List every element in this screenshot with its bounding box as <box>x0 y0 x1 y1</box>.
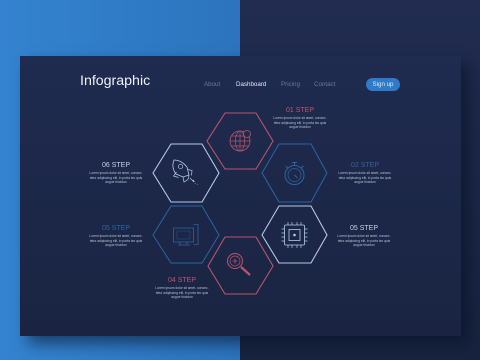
text block: 02 step: augue tincidun <box>354 180 376 184</box>
heading: Infographic: Infographic <box>80 73 150 89</box>
text block: 01 step <box>273 107 327 129</box>
text block: 03 step <box>337 225 391 247</box>
text block: 03 step: tetur adipiscing elit, in porta leo quis <box>338 239 390 243</box>
text block: 06 step: tetur adipiscing elit, in porta leo quis <box>90 176 142 180</box>
text block: 06 step: 06 STEP <box>102 162 130 169</box>
panel: main card <box>20 56 461 336</box>
nav: Dashboard: Dashboard <box>236 81 266 88</box>
background: blue left half <box>0 0 240 360</box>
text block: 02 step <box>338 162 392 184</box>
hexagon and icon: 02 stopwatch <box>262 144 327 202</box>
hexagon and icon: 06 rocket <box>153 144 219 202</box>
text block: 05 step: augue tincidun <box>105 243 127 247</box>
text block: 03 step: 05 STEP <box>350 225 378 232</box>
text block: 05 step: 05 STEP <box>102 225 130 232</box>
text block: 04 step: augue tincidun <box>171 295 193 299</box>
text block: 06 step: augue tincidun <box>105 180 127 184</box>
hexagon and icon: 01 globe <box>207 113 273 169</box>
text block: 05 step: Lorem ipsum dolor sit amet, consec- <box>89 234 143 238</box>
nav: Contact: Contact <box>314 81 335 88</box>
text block: 03 step: augue tincidun <box>353 243 375 247</box>
text block: 06 step <box>89 162 143 184</box>
button: Sign up: Sign up <box>372 81 394 88</box>
text block: 03 step: Lorem ipsum dolor sit amet, consec- <box>337 234 391 238</box>
text block: 01 step: augue tincidun <box>289 125 311 129</box>
nav: Pricing: Pricing <box>281 81 300 88</box>
hexagon and icon: 05 monitor <box>153 206 219 263</box>
text block: 04 step: Lorem ipsum dolor sit amet, consec- <box>155 286 209 290</box>
text block: 01 step: 01 STEP <box>286 107 314 114</box>
text block: 02 step: 02 STEP <box>351 162 379 169</box>
text block: 01 step: Lorem ipsum dolor sit amet, consec- <box>273 116 327 120</box>
text block: 05 step <box>89 225 143 247</box>
text block: 02 step: tetur adipiscing elit, in porta leo quis <box>339 176 391 180</box>
hexagon and icon: 03 chip <box>262 206 327 263</box>
text block: 04 step: 04 STEP <box>168 277 196 284</box>
nav: About: About <box>204 81 220 88</box>
hexagon and icon: 04 magnifier <box>208 237 273 294</box>
text block: 05 step: tetur adipiscing elit, in porta leo quis <box>90 239 142 243</box>
button: Sign up <box>366 78 400 91</box>
text block: 06 step: Lorem ipsum dolor sit amet, consec- <box>89 171 143 175</box>
text block: 04 step <box>155 277 209 299</box>
text block: 04 step: tetur adipiscing elit, in porta leo quis <box>156 291 208 295</box>
background: dark right half <box>240 0 480 360</box>
text block: 02 step: Lorem ipsum dolor sit amet, consec- <box>338 171 392 175</box>
text block: 01 step: tetur adipiscing elit, in porta leo quis <box>274 121 326 125</box>
